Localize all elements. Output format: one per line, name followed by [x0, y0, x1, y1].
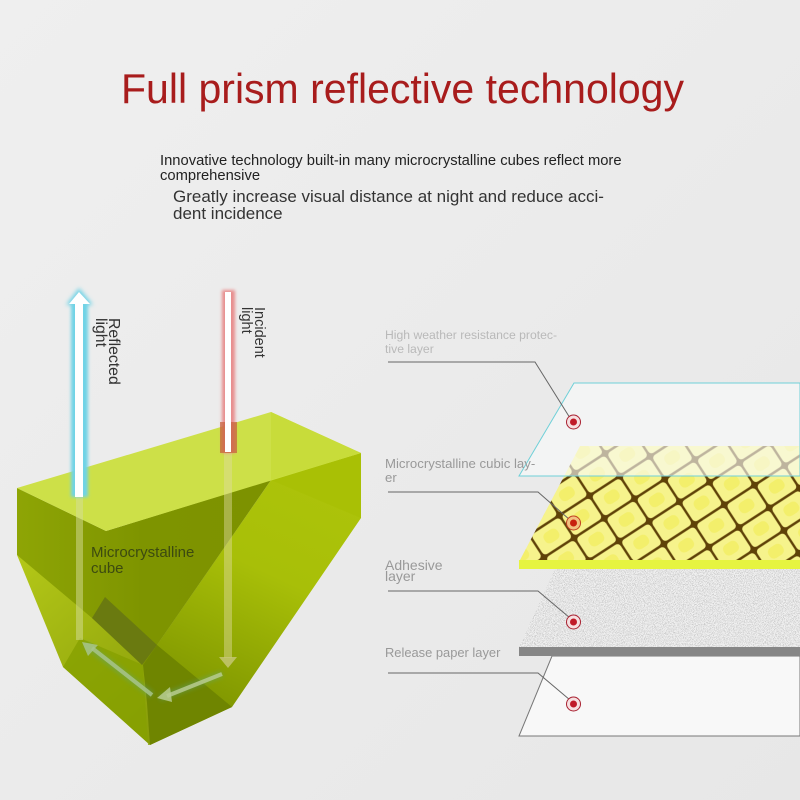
prism: right face	[143, 453, 361, 707]
label: incident light: Incident	[251, 307, 267, 358]
text block: benefit: dent incidence	[173, 204, 283, 223]
text block: benefit	[173, 187, 604, 223]
layer: release bar	[519, 647, 800, 656]
title: Full prism reflective technology	[121, 65, 684, 112]
label: microcrystalline cube	[91, 544, 194, 577]
arrow: bounce upward	[82, 642, 152, 695]
callout: release paper layer: Release paper layer	[385, 645, 501, 660]
text block: intro: comprehensive	[160, 168, 260, 184]
layer diagram	[385, 328, 800, 736]
arrow: incident light inside prism	[219, 452, 237, 668]
callout: microcrystalline layer: Microcrystalline cubic lay-	[385, 456, 535, 471]
layer: microcrystalline mesh	[520, 446, 800, 560]
layer: protective film	[519, 383, 800, 476]
label: microcrystalline cube: Microcrystalline	[91, 544, 194, 561]
text block: intro: Innovative technology built-in many microcrystalline cubes reflect more	[160, 153, 622, 169]
callout: protective layer	[385, 328, 580, 429]
label: reflected light	[92, 318, 122, 385]
arrow: incident light	[220, 290, 237, 453]
prism: dark inner quad	[92, 597, 157, 665]
label: reflected light: light	[92, 318, 109, 348]
layer: yellow edge	[519, 560, 800, 569]
label: incident light	[238, 307, 267, 358]
callout: release paper layer	[385, 645, 580, 711]
prism: top face	[17, 412, 361, 531]
callout: microcrystalline layer	[385, 456, 580, 530]
prism: bottom right facet	[143, 645, 232, 745]
callout: adhesive layer: layer	[385, 568, 416, 584]
layer: release paper	[519, 656, 800, 736]
label: microcrystalline cube: cube	[91, 560, 124, 577]
callout: adhesive layer: Adhesive	[385, 557, 443, 573]
prism: lower left face	[17, 555, 232, 745]
prism: inner dark band	[17, 480, 271, 665]
label: incident light: light	[238, 307, 254, 334]
callout: protective layer: High weather resistance protec-	[385, 328, 557, 342]
callout: protective layer: tive layer	[385, 342, 434, 356]
callout: microcrystalline layer: er	[385, 470, 397, 485]
callout: adhesive layer	[385, 557, 580, 629]
prism: bottom left facet	[63, 638, 150, 745]
prism: right upper shade	[271, 453, 361, 518]
layer: adhesive	[519, 569, 800, 647]
arrow: reflected light	[66, 288, 93, 497]
prism diagram	[17, 288, 361, 745]
label: reflected light: Reflected	[105, 318, 122, 385]
arrow: bounce to left	[157, 674, 222, 702]
text block: intro	[160, 153, 622, 184]
arrow: reflected light inside prism	[76, 497, 83, 640]
text block: benefit: Greatly increase visual distance at night and reduce acci-	[173, 187, 604, 206]
